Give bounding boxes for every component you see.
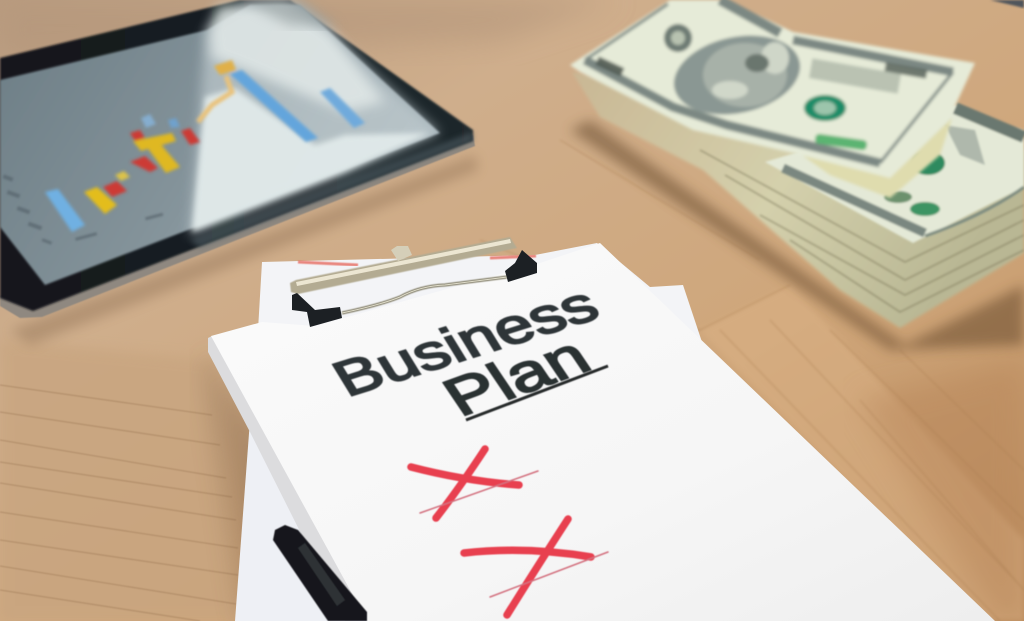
- left seal: [664, 24, 692, 52]
- clipboard with papers: [205, 237, 995, 621]
- bill fold underside: [795, 118, 952, 198]
- back sheet upper: [258, 243, 703, 345]
- paper stack left edge: [208, 336, 370, 621]
- back sheet lower: [235, 420, 420, 621]
- clip wire: [342, 277, 507, 313]
- stack edges: [572, 72, 1024, 328]
- paper shadow: [205, 350, 360, 621]
- stack shadow: [570, 120, 1024, 350]
- red cross 2: [464, 519, 608, 615]
- dark corner top right: [990, 0, 1024, 8]
- handwritten title: Plan: [431, 325, 601, 427]
- tablet edge: [0, 135, 475, 318]
- red cross 1: [411, 449, 538, 518]
- chart bars: [45, 60, 365, 232]
- lower bill: [765, 105, 1024, 243]
- top bill: [570, 0, 975, 198]
- pen: [273, 525, 367, 621]
- tablet body: [0, 0, 473, 311]
- handwritten title: [322, 276, 608, 427]
- left clamp: [292, 293, 342, 327]
- tablet screen: [0, 5, 440, 285]
- clip: [290, 237, 537, 327]
- stack of cash: [570, 0, 1024, 350]
- top sheet: [211, 243, 995, 621]
- serial numbers and corners: [815, 133, 867, 151]
- handwritten title: Business: [322, 276, 608, 407]
- tablet shadow: [10, 155, 478, 345]
- treasury seal: [804, 95, 846, 121]
- right clamp: [505, 250, 537, 282]
- clip knob: [391, 246, 412, 261]
- portrait oval: [666, 25, 808, 125]
- tablet with chart: [0, 0, 478, 345]
- clip bar: [290, 237, 517, 294]
- screen reflections: [190, 0, 473, 248]
- bill frame: [585, 0, 953, 163]
